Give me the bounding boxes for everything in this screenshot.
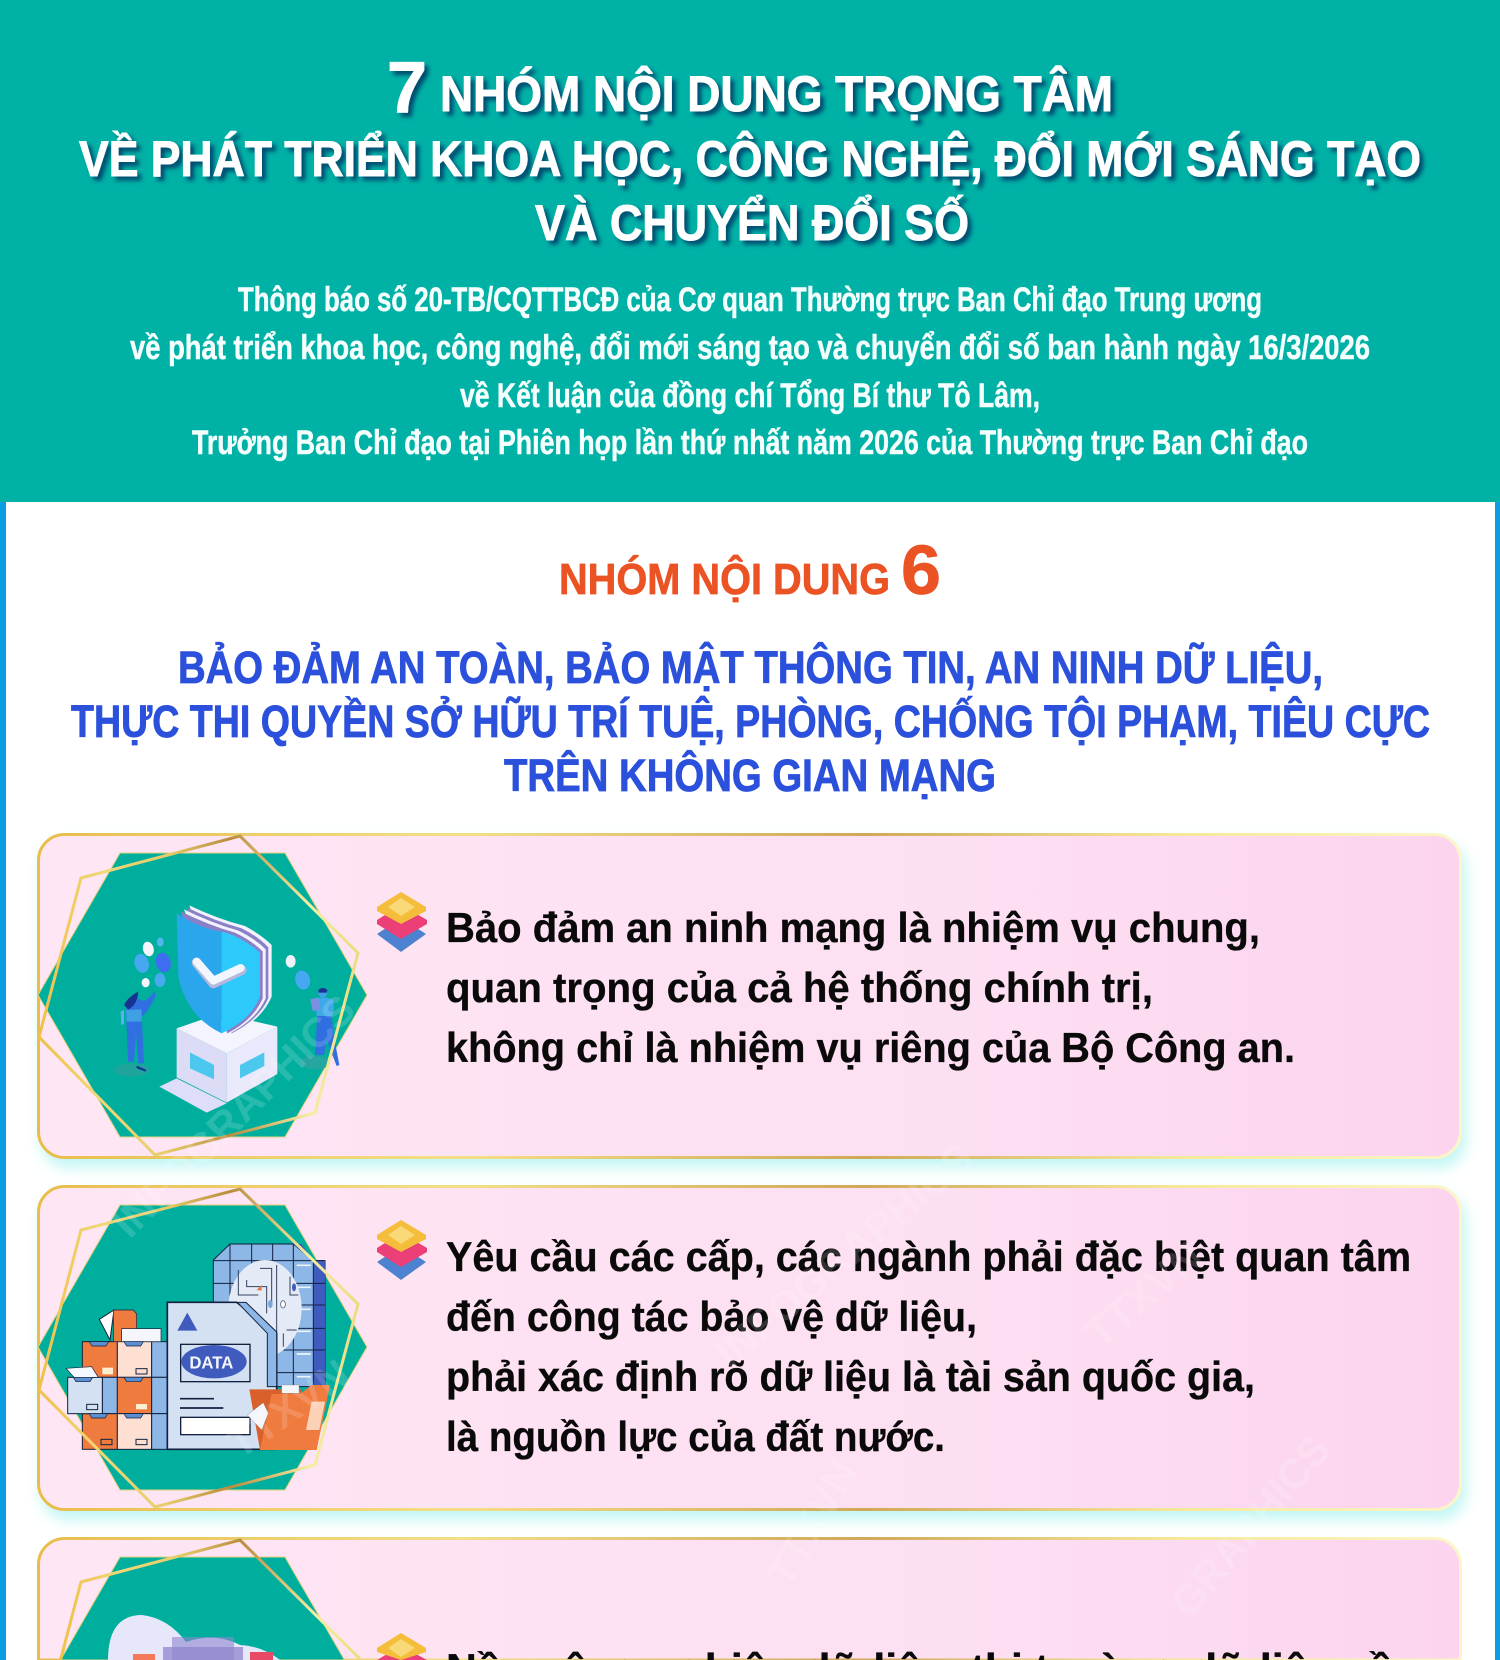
icon: stacked layers [377,1633,427,1660]
title [79,48,1421,251]
subtitle text block: về Kết luận của đồng chí Tổng Bí thư Tô Lâm, [460,377,1040,415]
watermark: TTXVN [757,1452,867,1594]
watermark: INFOGRAPHICS [103,985,364,1246]
subtitle text block [130,281,1370,462]
section heading: BẢO ĐẢM AN TOÀN, BẢO MẬT THÔNG TIN, AN NINH DỮ LIỆU, [178,642,1323,693]
icon: teal hexagon [60,1557,344,1660]
card 3 [37,1537,1462,1660]
card 2 text: phải xác định rõ dữ liệu là tài sản quốc gia, [446,1353,1255,1400]
icon: teal hexagon [38,1205,367,1490]
page side borders [0,500,1500,1660]
watermark [103,985,1339,1626]
card 2 text: là nguồn lực của đất nước. [446,1413,945,1460]
illustration: cloud with data panels [108,1615,280,1660]
card 2 text: Yêu cầu các cấp, các ngành phải đặc biệt quan tâm [446,1233,1411,1280]
card 1 text: Bảo đảm an ninh mạng là nhiệm vụ chung, [446,904,1260,951]
card 1 text [446,904,1295,1071]
illustration: data document, file boxes and folder [66,1244,330,1450]
icon: stacked layers [377,892,427,952]
gold hexagon outline [39,836,358,1155]
title: 7 [387,48,427,128]
gold hexagon outline [60,1540,361,1660]
watermark: INFOGRAPHICS [706,1134,982,1377]
icon: stacked layers [377,1220,427,1280]
section label: nhóm nội dung 6: 6 [901,531,941,609]
title: NHÓM NỘI DUNG TRỌNG TÂM [440,65,1113,122]
card 1 text: không chỉ là nhiệm vụ riêng của Bộ Công an. [446,1024,1295,1071]
watermark: GRAPHICS [1161,1426,1339,1626]
illustration: data document, file boxes and folder: DATA [189,1353,233,1373]
card 2 [38,1186,1460,1510]
watermark: TTXVN [218,1350,358,1467]
header panel [0,0,1500,502]
watermark: TTXVN [1076,1232,1211,1357]
section label: nhóm nội dung 6: NHÓM NỘI DUNG [559,553,890,604]
section label: nhóm nội dung 6 [559,531,941,609]
section heading: TRÊN KHÔNG GIAN MẠNG [504,750,996,801]
card 1 text: quan trọng của cả hệ thống chính trị, [446,964,1153,1011]
title: VÀ CHUYỂN ĐỔI SỐ [535,194,969,251]
card 2 text [446,1233,1411,1460]
icon: teal hexagon [38,853,367,1137]
card 1 [38,834,1460,1158]
section heading [71,642,1430,801]
illustration: shield on a pedestal with two people [113,905,339,1113]
gold hexagon outline [39,1189,358,1507]
card 2 text: đến công tác bảo vệ dữ liệu, [446,1293,977,1340]
